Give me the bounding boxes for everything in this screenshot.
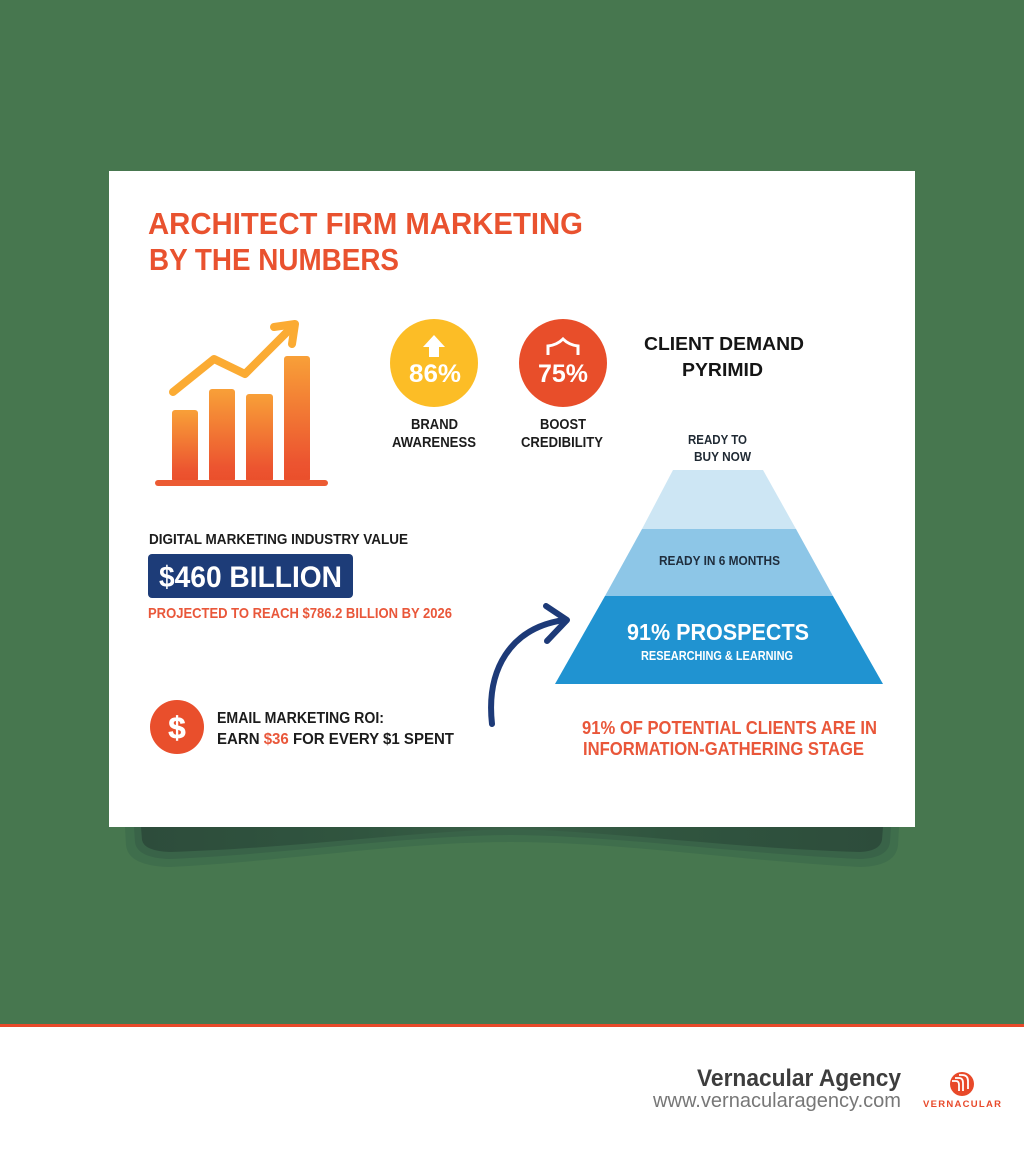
projection text: PROJECTED TO REACH $786.2 BILLION BY 2026: [148, 605, 452, 622]
stat: 86% brand awareness: AWARENESS: [392, 435, 476, 451]
stat: 86% brand awareness: [390, 319, 478, 451]
icon: dollar coin: $: [168, 710, 186, 745]
tier label: ready to buy now: READY TO: [688, 433, 747, 447]
tier: ready in 6 months: [605, 529, 833, 596]
pyramid caption: INFORMATION-GATHERING STAGE: [583, 739, 864, 759]
tier label: ready to buy now: BUY NOW: [694, 450, 751, 464]
icon: dollar coin: [150, 700, 204, 754]
stat: 75% boost credibility: [519, 319, 607, 451]
title: BY THE NUMBERS: [149, 242, 399, 277]
arrow to pyramid: [491, 606, 567, 724]
email ROI text: EMAIL MARKETING ROI:: [217, 710, 384, 727]
logo: [923, 1072, 1001, 1110]
email ROI text: EARN $36 FOR EVERY $1 SPENT: [217, 731, 454, 748]
pyramid chart: [555, 433, 883, 684]
footer band: [0, 1027, 1024, 1154]
tier label: ready to buy now: [688, 433, 751, 464]
pyramid caption: [582, 718, 877, 759]
email ROI text: [217, 710, 454, 748]
stat: 75% boost credibility: CREDIBILITY: [521, 435, 603, 451]
stat: 86% brand awareness: 86%: [409, 360, 461, 388]
stat: 75% boost credibility: 75%: [538, 360, 588, 388]
title: ARCHITECT FIRM MARKETING: [148, 206, 583, 241]
pyramid heading: PYRIMID: [682, 359, 763, 380]
stat: 75% boost credibility: BOOST: [540, 417, 586, 433]
tier: top: [642, 470, 796, 529]
footer accent line: [0, 1024, 1024, 1027]
tier: ready in 6 months: READY IN 6 MONTHS: [659, 554, 780, 568]
bar chart icon: [155, 324, 328, 486]
panel: white card: [109, 171, 915, 827]
tier: 91% prospects: 91% PROSPECTS: [627, 619, 809, 645]
industry value heading: DIGITAL MARKETING INDUSTRY VALUE: [149, 531, 408, 548]
footer agency name: Vernacular Agency: [697, 1065, 902, 1092]
footer website: www.vernacularagency.com: [652, 1090, 901, 1112]
pyramid caption: 91% OF POTENTIAL CLIENTS ARE IN: [582, 718, 877, 738]
logo: VERNACULAR: [923, 1099, 1001, 1110]
card shadow: [125, 827, 899, 867]
icon: roof: [548, 339, 578, 355]
tier: 91% prospects: RESEARCHING & LEARNING: [641, 649, 793, 663]
value badge: $460 BILLION: [159, 561, 342, 594]
pyramid heading: [644, 333, 804, 380]
title: [148, 206, 583, 277]
tier: 91% prospects: [555, 596, 883, 684]
pyramid heading: CLIENT DEMAND: [644, 333, 804, 354]
icon: up arrow: [423, 335, 445, 357]
stat: 86% brand awareness: BRAND: [411, 417, 458, 433]
